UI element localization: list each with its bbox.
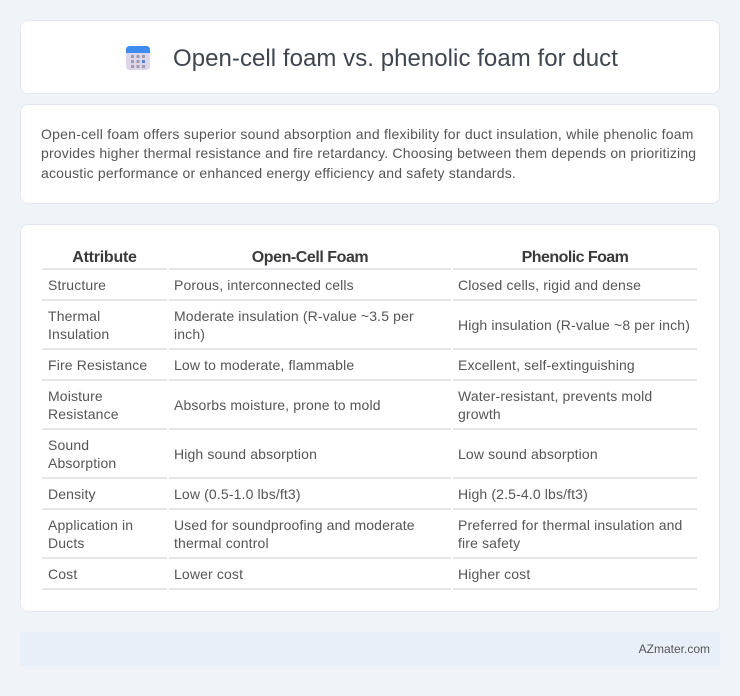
table rows: Cost xyxy=(48,566,77,582)
table rows: Structure xyxy=(48,277,106,293)
table rows: thermal control xyxy=(174,535,269,551)
table rows: High insulation (R-value ~8 per inch) xyxy=(458,317,690,333)
table rows: Ducts xyxy=(48,535,84,551)
table rows: Low (0.5-1.0 lbs/ft3) xyxy=(174,486,301,502)
table rows xyxy=(42,268,697,590)
table rows: Sound xyxy=(48,437,89,453)
footer bar xyxy=(20,632,720,666)
intro text panel xyxy=(20,104,720,204)
table header row xyxy=(72,249,628,266)
table rows: Low sound absorption xyxy=(458,446,598,462)
table header row: Attribute xyxy=(72,249,137,266)
table rows: Application in xyxy=(48,517,133,533)
table rows: Lower cost xyxy=(174,566,243,582)
intro paragraph: Open-cell foam offers superior sound absorption and flexibility for duct insulation, while phenolic foam xyxy=(41,126,694,142)
title: Open-cell foam vs. phenolic foam for duct xyxy=(173,45,618,72)
table rows: High sound absorption xyxy=(174,446,317,462)
intro paragraph: acoustic performance or enhanced energy efficiency and safety standards. xyxy=(41,165,516,181)
table rows: Absorption xyxy=(48,455,116,471)
comparison table panel xyxy=(20,224,720,612)
table rows: Density xyxy=(48,486,96,502)
table rows: growth xyxy=(458,406,501,422)
table rows: Fire Resistance xyxy=(48,357,147,373)
table header row: Open-Cell Foam xyxy=(252,249,368,266)
header panel xyxy=(20,20,720,94)
footer source text: AZmater.com xyxy=(639,642,710,656)
table header row: Phenolic Foam xyxy=(522,249,628,266)
intro paragraph xyxy=(41,126,696,181)
table rows: Porous, interconnected cells xyxy=(174,277,354,293)
table rows: Water-resistant, prevents mold xyxy=(458,388,652,404)
table rows: Moderate insulation (R-value ~3.5 per xyxy=(174,308,414,324)
table rows: Higher cost xyxy=(458,566,530,582)
table rows: fire safety xyxy=(458,535,520,551)
table rows: Moisture xyxy=(48,388,103,404)
table rows: inch) xyxy=(174,326,205,342)
icon: calendar xyxy=(126,46,150,70)
table rows: Used for soundproofing and moderate xyxy=(174,517,415,533)
table rows: Closed cells, rigid and dense xyxy=(458,277,641,293)
table rows: Thermal xyxy=(48,308,100,324)
table rows: Excellent, self-extinguishing xyxy=(458,357,635,373)
table rows: Absorbs moisture, prone to mold xyxy=(174,397,381,413)
table rows: Insulation xyxy=(48,326,109,342)
intro paragraph: provides higher thermal resistance and fire retardancy. Choosing between them depends on prioritizing xyxy=(41,145,696,161)
table rows: Resistance xyxy=(48,406,119,422)
table rows: Preferred for thermal insulation and xyxy=(458,517,682,533)
table rows: Low to moderate, flammable xyxy=(174,357,354,373)
table rows: High (2.5-4.0 lbs/ft3) xyxy=(458,486,588,502)
